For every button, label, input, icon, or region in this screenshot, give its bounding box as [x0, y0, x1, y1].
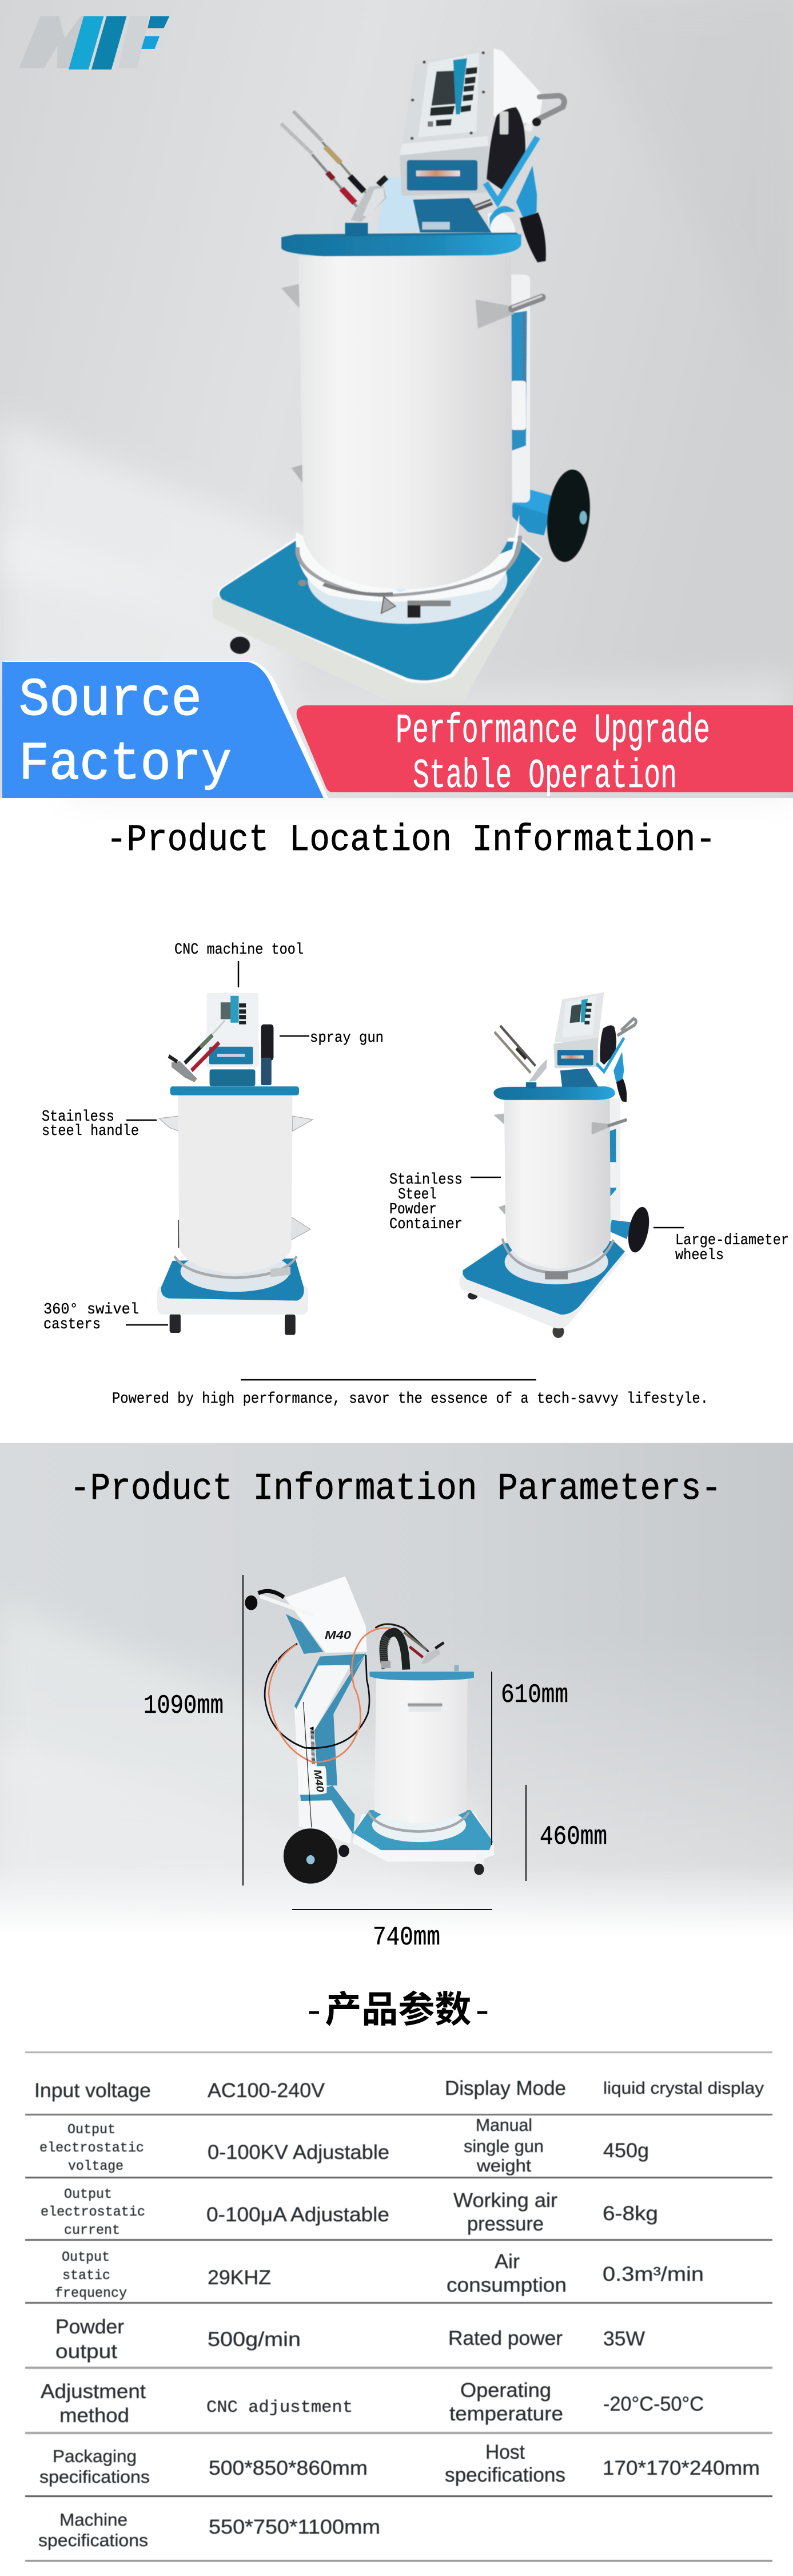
row: packaging specifications: 500*850*860mm	[209, 2457, 368, 2479]
panel: specifications	[25, 1990, 772, 2562]
machine: front view	[157, 993, 313, 1335]
row: output electrostatic current: 0-100μA Adjustable	[206, 2204, 389, 2226]
row: output electrostatic voltage: electrostatic	[39, 2141, 144, 2156]
label: spray gun: spray gun	[310, 1030, 384, 1047]
hero background	[0, 0, 793, 798]
label: stainless steel handle: Stainless	[42, 1109, 114, 1126]
lid, control box, spray guns	[281, 49, 564, 263]
machine: hero product photo	[212, 49, 594, 702]
clamp ring	[297, 536, 520, 618]
machine: angled view	[459, 993, 653, 1338]
row: powder output	[55, 2316, 645, 2363]
label: swivel casters	[43, 1301, 168, 1333]
row: output static frequency: consumption	[447, 2274, 567, 2296]
label: large-diameter wheels	[653, 1228, 789, 1264]
label: powder container	[389, 1172, 501, 1233]
label: stainless steel handle: steel handle	[42, 1123, 139, 1140]
row: output electrostatic current: pressure	[467, 2213, 544, 2235]
dimension: 740mm: 740mm	[373, 1923, 440, 1952]
heading: -Product Information Parameters-	[70, 1467, 722, 1510]
text: M40 on cabinet: M40	[325, 1629, 351, 1642]
row: adjustment method: CNC adjustment	[206, 2398, 353, 2418]
row: packaging specifications: specifications	[445, 2464, 565, 2486]
steel handles	[476, 296, 542, 328]
row: machine specifications: 550*750*1100mm	[209, 2516, 380, 2538]
row: output electrostatic voltage: 0-100KV Adjustable	[208, 2141, 389, 2164]
row: packaging specifications	[39, 2441, 760, 2487]
rear column with blue strip	[281, 275, 530, 502]
row: output electrostatic voltage: single gun	[464, 2136, 544, 2156]
heading: chinese title: -产品参数-	[303, 1990, 493, 2034]
logo	[19, 16, 169, 70]
banner: Source Factory	[2, 661, 328, 798]
table	[25, 2051, 772, 2562]
row: output electrostatic voltage	[39, 2115, 649, 2176]
row: output electrostatic current	[41, 2187, 658, 2238]
row: adjustment method: Operating	[460, 2379, 551, 2402]
row: powder output: Rated power	[448, 2327, 563, 2349]
row: powder output: Powder	[55, 2316, 124, 2338]
row: output electrostatic current: Output	[64, 2187, 112, 2202]
row: input voltage: Input voltage	[34, 2079, 151, 2102]
row: adjustment method: temperature	[449, 2403, 563, 2425]
row: output electrostatic voltage: Manual	[476, 2115, 532, 2135]
banner: performance	[297, 705, 793, 792]
panel: product information parameters	[0, 1443, 793, 1952]
row: output electrostatic voltage: voltage	[68, 2159, 123, 2174]
row: powder output: output	[55, 2340, 117, 2363]
dimension: 610mm: 610mm	[501, 1680, 568, 1710]
caption: Powered by high performance, savor the essence of a tech-savvy lifestyle.	[112, 1391, 708, 1408]
label: powder container: Stainless	[389, 1172, 463, 1189]
panel: product location information	[42, 819, 789, 1408]
row: output static frequency: frequency	[55, 2286, 127, 2301]
row: output electrostatic voltage: Output	[67, 2122, 115, 2138]
row: packaging specifications: Packaging	[53, 2446, 137, 2466]
row: packaging specifications: 170*170*240mm	[603, 2457, 760, 2479]
label: large-diameter wheels: wheels	[675, 1247, 724, 1264]
label: swivel casters: casters	[43, 1316, 101, 1333]
row: machine specifications: Machine	[59, 2510, 127, 2530]
row: powder output: 500g/min	[208, 2328, 301, 2351]
text: M40 on column: M40	[312, 1769, 326, 1793]
row: output electrostatic current: 6-8kg	[603, 2202, 658, 2225]
row: output electrostatic voltage: weight	[476, 2156, 531, 2176]
heading: -Product Location Information-	[106, 819, 716, 862]
panel: hero	[0, 0, 793, 800]
row: output electrostatic voltage: 450g	[603, 2140, 649, 2162]
heading: Source: Source	[19, 670, 202, 731]
row: machine specifications	[38, 2510, 380, 2550]
row: input voltage	[34, 2077, 764, 2102]
machine: side view	[245, 1576, 495, 1884]
row: output static frequency: Air	[495, 2250, 520, 2273]
wheel and axle	[508, 469, 594, 563]
powder container cylinder	[296, 256, 519, 602]
row: output static frequency: Output	[62, 2250, 110, 2265]
row: adjustment method: Adjustment	[41, 2380, 146, 2403]
row: powder output: 35W	[603, 2328, 645, 2350]
label: stainless steel handle	[42, 1109, 157, 1140]
row: output electrostatic current: current	[64, 2223, 120, 2238]
dimension: height 1090mm: 1090mm	[144, 1691, 224, 1721]
label: powder container: Powder	[389, 1201, 437, 1218]
row: adjustment method: method	[59, 2404, 129, 2427]
row: output static frequency: 29KHZ	[208, 2267, 271, 2289]
row: output static frequency: 0.3m³/min	[603, 2263, 704, 2285]
row: output electrostatic current: Working air	[453, 2189, 557, 2212]
label: powder container: Container	[389, 1216, 463, 1233]
row: packaging specifications: specifications	[39, 2467, 150, 2487]
row: output static frequency: static	[62, 2268, 110, 2284]
label: CNC machine tool: CNC machine tool	[174, 942, 304, 959]
row: adjustment method	[41, 2379, 704, 2427]
row: machine specifications: specifications	[38, 2530, 148, 2550]
row: adjustment method: -20°C-50°C	[603, 2393, 704, 2415]
row: output static frequency	[55, 2250, 704, 2301]
dimension: 460mm: 460mm	[540, 1822, 607, 1852]
row: output electrostatic current: electrostatic	[41, 2205, 145, 2220]
row: packaging specifications: Host	[485, 2441, 525, 2463]
machine base and casters	[212, 535, 543, 702]
row: input voltage: liquid crystal display	[603, 2079, 764, 2098]
heading: Factory: Factory	[19, 735, 232, 795]
section background	[0, 1443, 793, 1935]
row: input voltage: Display Mode	[445, 2077, 566, 2099]
row: input voltage: AC100-240V	[208, 2079, 325, 2102]
label: powder container: Steel	[398, 1186, 437, 1204]
label: swivel casters: 360° swivel	[43, 1301, 139, 1319]
